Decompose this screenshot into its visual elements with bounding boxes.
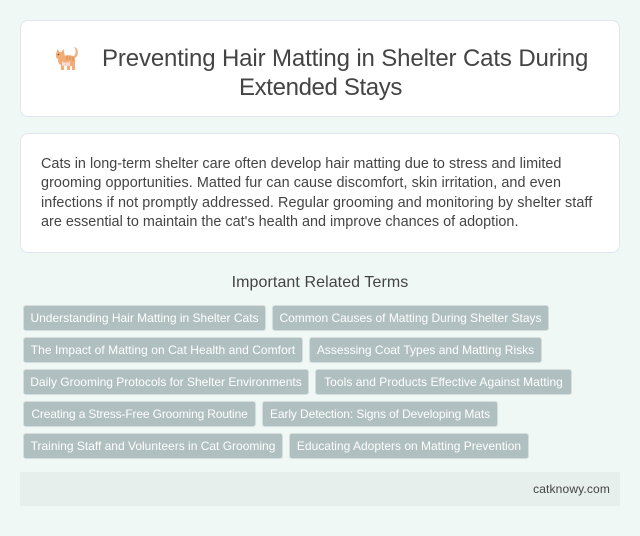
tag: Common Causes of Matting During Shelter Stays: [279, 311, 542, 325]
tag: Educating Adopters on Matting Prevention: [297, 439, 521, 453]
tag: [309, 337, 542, 363]
tag: [23, 369, 309, 395]
title heading: Extended Stays: [239, 74, 402, 101]
title heading: Preventing Hair Matting in Shelter Cats During: [102, 45, 588, 72]
tag: [272, 305, 549, 331]
tag: [23, 401, 256, 427]
intro paragraph: are essential to maintain the cat's health and improve chances of adoption.: [41, 214, 518, 230]
intro paragraph: infections if not promptly addressed. Regular grooming and monitoring by shelter staff: [41, 195, 592, 211]
tag: Creating a Stress-Free Grooming Routine: [31, 407, 248, 421]
related terms heading: Important Related Terms: [232, 274, 408, 291]
intro paragraph: [41, 156, 592, 230]
tag: [315, 369, 572, 395]
title panel: [20, 20, 620, 117]
related term tags: [23, 305, 572, 459]
tag: Tools and Products Effective Against Matting: [324, 375, 563, 389]
tag: [23, 337, 303, 363]
tag: [262, 401, 498, 427]
tag: [23, 305, 266, 331]
tag: The Impact of Matting on Cat Health and Comfort: [31, 343, 295, 357]
icon: cat: [56, 47, 78, 70]
intro paragraph: Cats in long-term shelter care often develop hair matting due to stress and limited: [41, 156, 561, 172]
intro paragraph: grooming opportunities. Matted fur can cause discomfort, skin irritation, and even: [41, 175, 561, 191]
footer bar: [20, 472, 620, 506]
tag: [23, 433, 283, 459]
tag: Early Detection: Signs of Developing Mats: [270, 407, 490, 421]
tag: Understanding Hair Matting in Shelter Cats: [30, 311, 259, 325]
title heading: [102, 45, 588, 101]
tag: [289, 433, 529, 459]
tag: Training Staff and Volunteers in Cat Grooming: [31, 439, 275, 453]
panel: introduction text: [20, 133, 620, 253]
tag: Daily Grooming Protocols for Shelter Environments: [30, 375, 302, 389]
tag: Assessing Coat Types and Matting Risks: [317, 343, 534, 357]
footer source text: catknowy.com: [533, 482, 610, 496]
